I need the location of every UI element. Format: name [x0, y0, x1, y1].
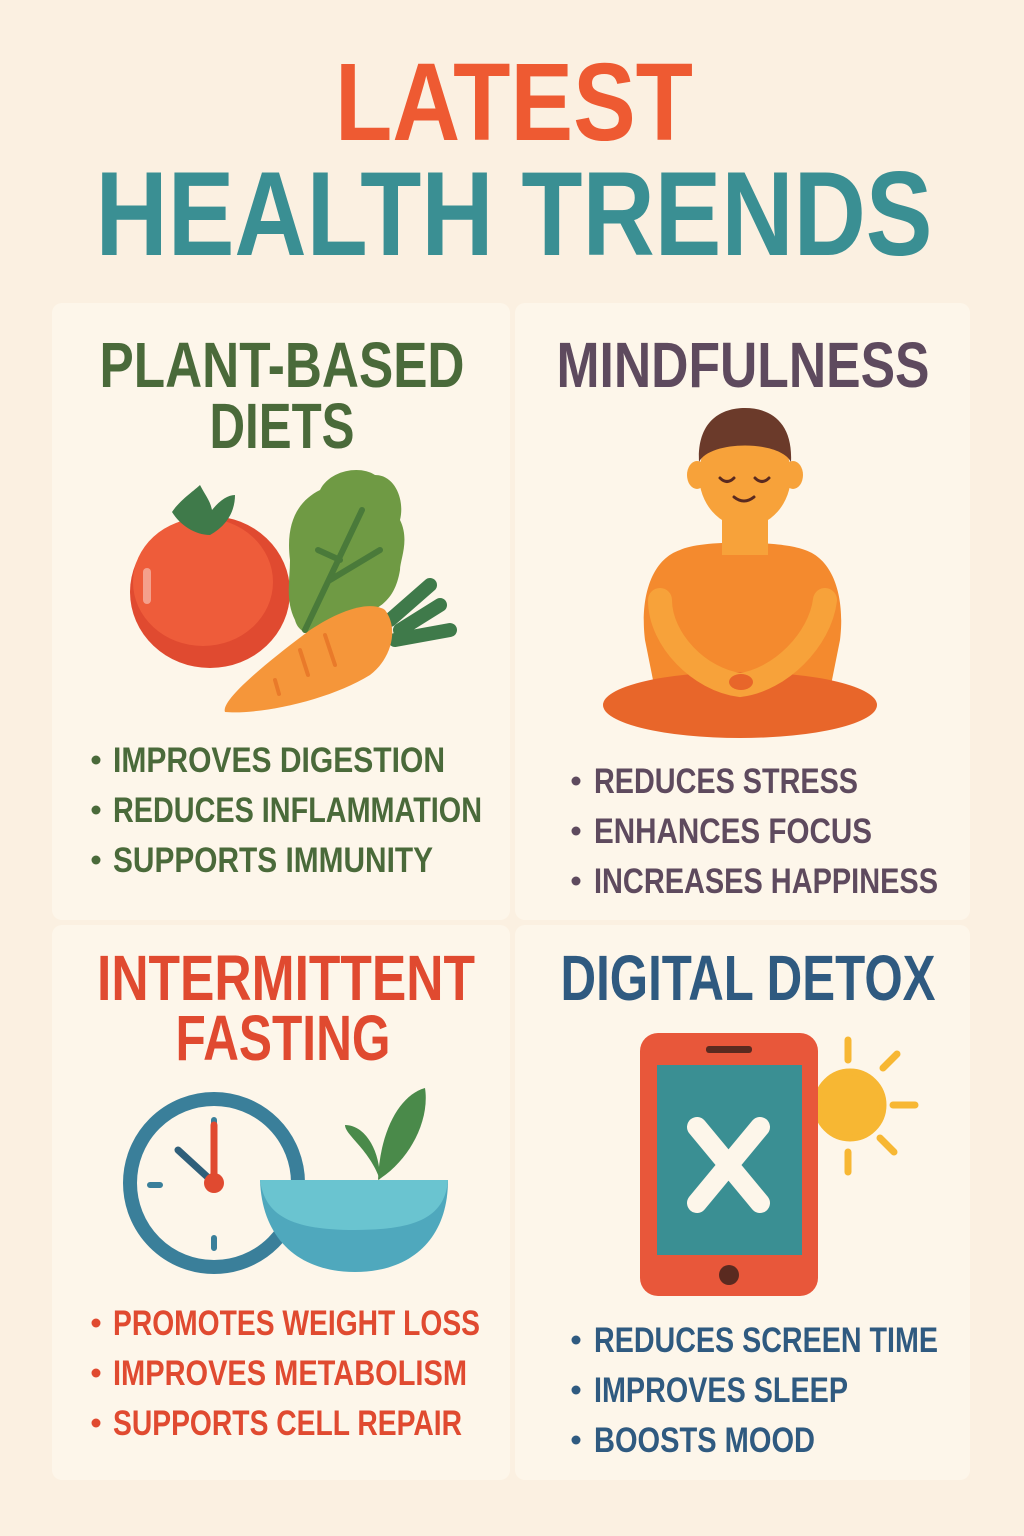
bullets: fasting: IMPROVES METABOLISM	[113, 1354, 467, 1393]
bullets: fasting	[92, 1304, 480, 1443]
bullets: mindfulness: ENHANCES FOCUS	[594, 812, 872, 851]
bullets: digital detox: BOOSTS MOOD	[594, 1421, 815, 1460]
heading: plant-based diets: PLANT-BASED	[100, 329, 464, 401]
bullets: fasting: SUPPORTS CELL REPAIR	[113, 1404, 462, 1443]
icon: sun	[817, 1040, 915, 1172]
icon: clock and bowl	[130, 1088, 448, 1272]
bullets: plant-based: SUPPORTS IMMUNITY	[113, 841, 433, 880]
heading: intermittent fasting: INTERMITTENT	[97, 942, 475, 1014]
heading: intermittent fasting	[97, 942, 475, 1074]
bullets: digital detox: IMPROVES SLEEP	[594, 1371, 848, 1410]
bullets: mindfulness: REDUCES STRESS	[594, 762, 858, 801]
panel: intermittent fasting	[52, 925, 510, 1480]
panel: digital detox	[515, 925, 970, 1480]
icon: phone	[640, 1033, 818, 1296]
bullets: plant-based	[92, 741, 482, 880]
title: LATEST	[335, 41, 693, 164]
panel: plant-based diets	[52, 303, 510, 920]
heading: intermittent fasting: FASTING	[176, 1002, 390, 1074]
bullets: plant-based: IMPROVES DIGESTION	[113, 741, 445, 780]
bullets: fasting: PROMOTES WEIGHT LOSS	[113, 1304, 480, 1343]
icon: meditating person	[603, 408, 877, 738]
bullets: mindfulness: INCREASES HAPPINESS	[594, 862, 938, 901]
heading: plant-based diets	[100, 329, 464, 462]
panel: mindfulness	[515, 303, 970, 920]
bullets: plant-based: REDUCES INFLAMMATION	[113, 791, 482, 830]
heading: mindfulness: MINDFULNESS	[556, 329, 930, 401]
icon: vegetables	[130, 470, 450, 712]
bullets: digital detox	[572, 1321, 938, 1460]
bullets: mindfulness	[572, 762, 938, 901]
title	[96, 41, 932, 281]
heading: plant-based diets: DIETS	[210, 390, 354, 462]
bullets: digital detox: REDUCES SCREEN TIME	[594, 1321, 938, 1360]
